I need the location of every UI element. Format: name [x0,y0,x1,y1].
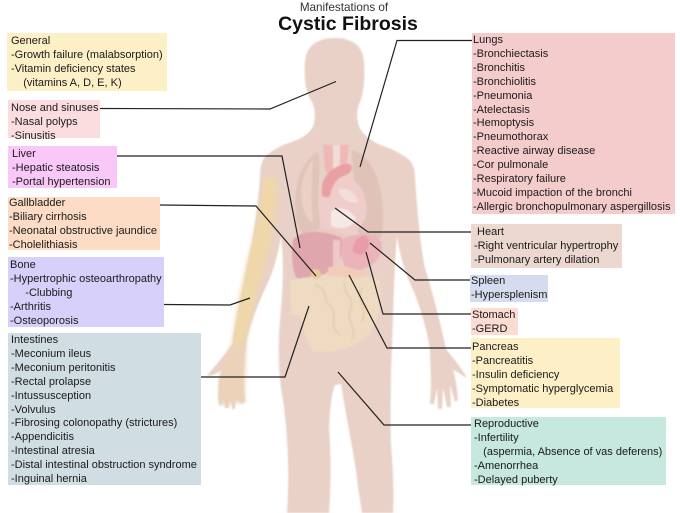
leader line: stomach [366,252,472,314]
panel: heart: Heart -Right ventricular hypertrophy -Pulmonary artery dilation [474,226,618,266]
heart [319,164,367,234]
hand bones [219,344,246,405]
panel: reproductive: Reproductive -Infertility (aspermia, Absence of vas deferens) -Amenorrhea -Delayed puberty [474,418,662,486]
leader line: liver [113,156,300,248]
arm bone [232,178,278,346]
intestines [290,266,380,352]
leader line: bone [164,298,250,305]
panel: bone: Bone -Hypertrophic osteoarthropathy -Clubbing -Arthritis -Osteoporosis [10,259,162,327]
trachea and vessels [323,145,349,178]
leader line: spleen [370,243,471,280]
panel: pancreas: Pancreas -Pancreatitis -Insulin deficiency -Symptomatic hyperglycemia -Diabetes [472,341,613,409]
panel: nose and sinuses: Nose and sinuses -Nasal polyps -Sinusitis [11,102,98,142]
human body silhouette [207,38,467,513]
panel: general: General -Growth failure (malabsorption) -Vitamin deficiency states (vitamins A, D, E, K) [11,35,163,89]
diaphragm [310,228,350,247]
leader line: pancreas [349,275,472,348]
leader line: lungs [360,40,472,167]
panel: gallbladder: Gallbladder -Biliary cirrhosis -Neonatal obstructive jaundice -Cholelithiasis [9,197,157,251]
leader line: heart [335,208,472,232]
title [278,1,418,35]
leader line: nose and sinuses [100,82,336,109]
panel: intestines: Intestines -Meconium ileus -Meconium peritonitis -Rectal prolapse -Intussusception -Volvulus -Fibrosing colonopathy (strictures) -Appendicitis -Intestinal atresia -Distal intestinal obstruction syndrome -Inguinal hernia [11,334,197,485]
liver [292,232,343,280]
leader line: reproductive [338,372,472,425]
leader line: gallbladder [160,205,316,276]
leader line: intestines [201,306,309,377]
lungs [295,150,383,244]
panel: spleen: Spleen -Hypersplenism [471,275,547,301]
title line 2: Cystic Fibrosis [278,13,418,35]
panel: lungs: Lungs -Bronchiectasis -Bronchitis -Bronchiolitis -Pneumonia -Atelectasis -Hemoptysis -Pneumothorax -Reactive airway disease -Cor pulmonale -Respiratory failure -Mucoid impaction of the bronchi -Allergic bronchopulmonary aspergillosis [473,34,670,213]
stomach and spleen [333,234,382,272]
panel: liver: Liver -Hepatic steatosis -Portal hypertension [12,148,110,188]
title line 1: Manifestations of [300,1,388,14]
panel: stomach: Stomach -GERD [472,309,515,335]
